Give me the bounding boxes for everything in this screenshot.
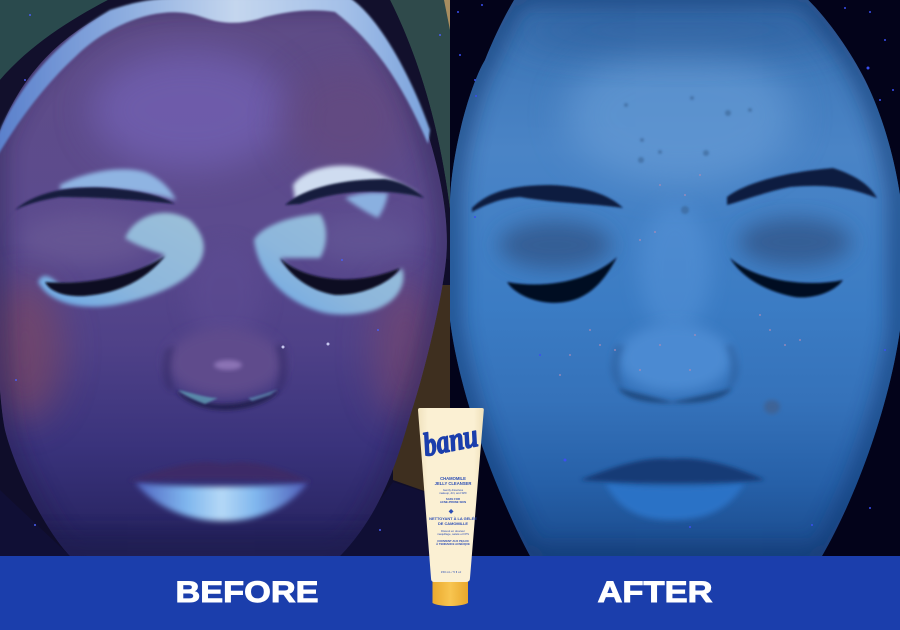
product text: makeup, dirt, and SPF [439,491,467,495]
product text: CONVIENT AUX PEAUX [437,539,469,543]
tube cap [432,581,468,606]
panel: after photo [450,0,900,556]
eyebrow sunscreen right [293,166,420,200]
product text: 150 mL / 5 fl oz [441,570,462,574]
specks [457,4,894,528]
right lashes [730,258,843,297]
right eye socket [739,218,851,266]
face [0,0,450,570]
specks [15,14,441,531]
product text: JELLY CLEANSER [435,481,471,486]
product text: SAFE FOR [446,497,460,501]
tube body [418,408,484,582]
product tube [418,408,484,606]
nose [162,322,288,412]
sunscreen hairline [0,0,430,155]
left eyelid [30,222,136,263]
panel: before photo [0,0,450,570]
lips [128,462,312,521]
eyebrow sunscreen left [60,169,176,200]
mark on cheek [764,400,780,414]
product text: ACNE-PRONE SKIN [440,500,466,504]
heading: before label: BEFORE [176,576,318,609]
sunscreen around left eye [38,213,204,307]
freckles [559,174,801,376]
product text: CHAMOMILE [440,476,466,481]
left eyebrow [15,187,175,210]
product text: DE CAMOMILLE [438,521,468,526]
eyebrow patch right [345,193,388,218]
right eyelid [332,232,398,256]
product text: Dissout en douceur [441,529,465,533]
face [450,0,900,556]
right eyebrow [727,168,877,205]
bottom banner [0,556,900,630]
sunscreen around right eye [254,214,404,315]
nose [610,205,739,403]
right lashes [280,258,400,295]
product text: NETTOYANT À LA GELÉE [429,516,477,521]
left eyebrow [472,185,623,212]
lips [580,458,765,520]
right eyebrow [285,179,424,205]
product text: maquillage, saleté et FPS [437,532,469,536]
product text: Gently dissolves [443,488,464,492]
product text [429,476,477,574]
blemishes [624,96,752,214]
product text: ◆ [448,508,454,515]
left lashes [45,256,165,296]
left lashes [507,257,617,303]
heading: after label: AFTER [598,576,713,609]
left eye socket [499,221,611,269]
brand logo: banu [420,418,481,464]
product text: À TENDANCE ACNÉIQUE [436,541,470,546]
